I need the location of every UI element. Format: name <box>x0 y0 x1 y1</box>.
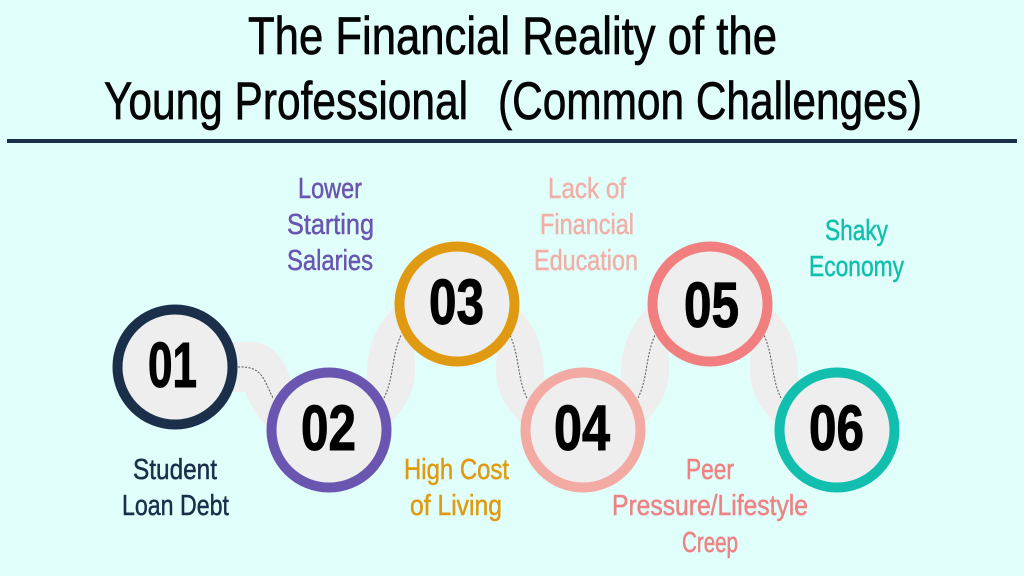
step 06 circle: 06 <box>809 392 864 464</box>
label: Lower Starting Salaries: Salaries <box>287 245 373 277</box>
label: Lack of Financial Education: Education <box>534 245 638 277</box>
label: High Cost of Living: High Cost <box>404 454 509 486</box>
connector: 03 to 04 <box>491 306 551 428</box>
label: High Cost of Living: of Living <box>410 490 502 522</box>
label: Lack of Financial Education: Financial <box>540 209 634 241</box>
step 03 circle: 03 <box>429 266 484 338</box>
label: Peer Pressure/Lifestyle Creep <box>612 454 808 559</box>
label: Lack of Financial Education: Lack of <box>548 173 627 205</box>
label: Lower Starting Salaries <box>287 173 374 277</box>
connector: 05 to 06 <box>745 306 805 428</box>
step 04 circle: 04 <box>554 392 610 464</box>
label: Peer Pressure/Lifestyle Creep: Pressure/Lifestyle <box>612 490 808 522</box>
connector: 01 to 02 <box>232 342 291 428</box>
label: Peer Pressure/Lifestyle Creep: Peer <box>686 454 734 486</box>
label: Student Loan Debt: Student <box>133 454 217 486</box>
step 01 circle <box>118 310 232 424</box>
step 05 circle <box>652 246 768 362</box>
label: High Cost of Living <box>404 454 509 522</box>
connector: 02 to 03 <box>360 306 420 428</box>
step 04 circle <box>526 372 640 488</box>
title: (Common Challenges) <box>498 72 922 131</box>
step 02 circle <box>272 372 386 488</box>
label: Shaky Economy: Economy <box>809 251 904 283</box>
label: Lack of Financial Education <box>534 173 638 277</box>
step 05 circle: 05 <box>684 269 739 341</box>
step 06 circle <box>780 372 894 488</box>
label: Student Loan Debt: Loan Debt <box>122 490 229 522</box>
label: Student Loan Debt <box>122 454 229 522</box>
title: The Financial Reality of the <box>248 7 777 66</box>
title underline <box>7 139 1017 143</box>
step 01 circle: 01 <box>148 329 197 401</box>
label: Peer Pressure/Lifestyle Creep: Creep <box>682 527 738 559</box>
label: Shaky Economy: Shaky <box>825 215 888 247</box>
connector: 04 to 05 <box>614 306 674 428</box>
label: Lower Starting Salaries: Starting <box>287 209 374 241</box>
label: Shaky Economy <box>809 215 904 283</box>
title: Young Professional <box>104 72 468 131</box>
step 02 circle: 02 <box>301 392 356 464</box>
title <box>104 7 922 131</box>
step 03 circle <box>400 246 514 362</box>
label: Lower Starting Salaries: Lower <box>298 173 362 205</box>
